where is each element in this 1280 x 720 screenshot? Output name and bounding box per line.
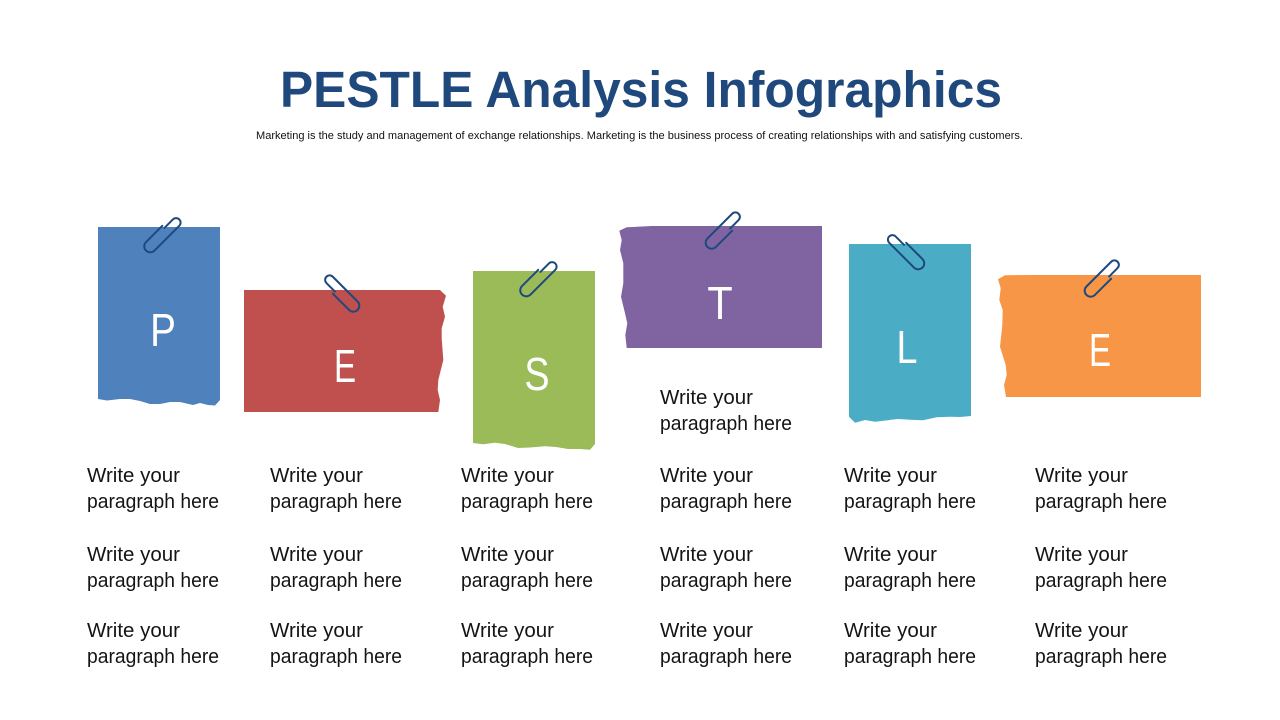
- text block: L column row 3: Write your: [844, 619, 937, 642]
- text block: S column row 3: [461, 619, 593, 668]
- text block: last E column row 2: [1035, 543, 1167, 592]
- text block: last E column row 2: paragraph here: [1035, 569, 1167, 592]
- panel: S note: [473, 258, 595, 450]
- letter E: E: [1089, 326, 1111, 376]
- text block: L column row 2: paragraph here: [844, 569, 976, 592]
- text block: S column row 1: paragraph here: [461, 490, 593, 513]
- text block: T column row 1: [660, 464, 792, 513]
- title: PESTLE Analysis Infographics: [280, 61, 1002, 118]
- torn paper: blue: [98, 227, 220, 406]
- text block: E column row 2: [270, 543, 402, 592]
- text block: P column row 1: paragraph here: [87, 490, 219, 513]
- text block: L column row 1: Write your: [844, 464, 937, 487]
- text block: E column row 1: [270, 464, 402, 513]
- text block: last E column row 1: paragraph here: [1035, 490, 1167, 513]
- letter L: L: [897, 321, 917, 373]
- torn paper: green: [473, 271, 595, 450]
- text block: last E column row 3: paragraph here: [1035, 645, 1167, 668]
- text block: E column row 1: Write your: [270, 464, 363, 487]
- text block: S column row 3: paragraph here: [461, 645, 593, 668]
- text block: T column row 1: paragraph here: [660, 490, 792, 513]
- text block: T column row 0: paragraph here: [660, 412, 792, 435]
- torn paper: teal: [849, 244, 971, 423]
- torn paper: orange: [998, 275, 1201, 397]
- text block: last E column row 3: Write your: [1035, 619, 1128, 642]
- text block: E column row 3: Write your: [270, 619, 363, 642]
- text block: T column row 3: paragraph here: [660, 645, 792, 668]
- panel: T note: [619, 211, 822, 348]
- text block: T column row 0: Write your: [660, 386, 753, 409]
- text block: T column row 3: Write your: [660, 619, 753, 642]
- icon: paper clip: [321, 274, 362, 314]
- icon: paper clip: [518, 258, 558, 299]
- text block: T column row 2: paragraph here: [660, 569, 792, 592]
- icon: paper clip: [886, 231, 927, 272]
- text block: P column row 1: [87, 464, 219, 513]
- text block: E column row 3: paragraph here: [270, 645, 402, 668]
- text block: S column row 2: paragraph here: [461, 569, 593, 592]
- text block: P column row 2: paragraph here: [87, 569, 219, 592]
- text block: E column row 1: paragraph here: [270, 490, 402, 513]
- panel: P note: [98, 214, 220, 406]
- text block: P column row 1: Write your: [87, 464, 180, 487]
- torn paper: red: [244, 290, 446, 412]
- text block: E column row 2: paragraph here: [270, 569, 402, 592]
- text block: last E column row 1: [1035, 464, 1167, 513]
- text block: L column row 1: paragraph here: [844, 490, 976, 513]
- subtitle: Marketing is the study and management of exchange relationships. Marketing is the business process of creating relationships with and satisfying customers.: [256, 130, 1023, 142]
- text block: last E column row 3: [1035, 619, 1167, 668]
- text block: last E column row 1: Write your: [1035, 464, 1128, 487]
- panel: E (environmental) note: [998, 259, 1201, 397]
- text block: S column row 3: Write your: [461, 619, 554, 642]
- text block: T column row 2: Write your: [660, 543, 753, 566]
- icon: paper clip: [142, 214, 182, 255]
- text block: last E column row 2: Write your: [1035, 543, 1128, 566]
- text block: L column row 3: [844, 619, 976, 668]
- text block: T column row 1: Write your: [660, 464, 753, 487]
- text block: E column row 2: Write your: [270, 543, 363, 566]
- text block: S column row 1: [461, 464, 593, 513]
- text block: S column row 1: Write your: [461, 464, 554, 487]
- text block: L column row 3: paragraph here: [844, 645, 976, 668]
- text block: T column row 3: [660, 619, 792, 668]
- text block: S column row 2: [461, 543, 593, 592]
- text block: T column row 0: [660, 386, 792, 435]
- letter T: T: [707, 278, 733, 330]
- text block: P column row 3: Write your: [87, 619, 180, 642]
- text block: L column row 1: [844, 464, 976, 513]
- panel: L note: [849, 231, 971, 423]
- letter P: P: [150, 305, 176, 356]
- icon: paper clip: [703, 211, 744, 251]
- text block: E column row 3: [270, 619, 402, 668]
- text block: S column row 2: Write your: [461, 543, 554, 566]
- panel: E (economic) note: [244, 274, 446, 412]
- text block: P column row 3: [87, 619, 219, 668]
- text block: P column row 2: [87, 543, 219, 592]
- torn paper: purple: [619, 226, 822, 348]
- text block: L column row 2: [844, 543, 976, 592]
- text block: L column row 2: Write your: [844, 543, 937, 566]
- text block: P column row 2: Write your: [87, 543, 180, 566]
- text block: P column row 3: paragraph here: [87, 645, 219, 668]
- icon: paper clip: [1082, 259, 1123, 299]
- text block: T column row 2: [660, 543, 792, 592]
- letter E: E: [334, 342, 356, 392]
- letter S: S: [524, 348, 550, 400]
